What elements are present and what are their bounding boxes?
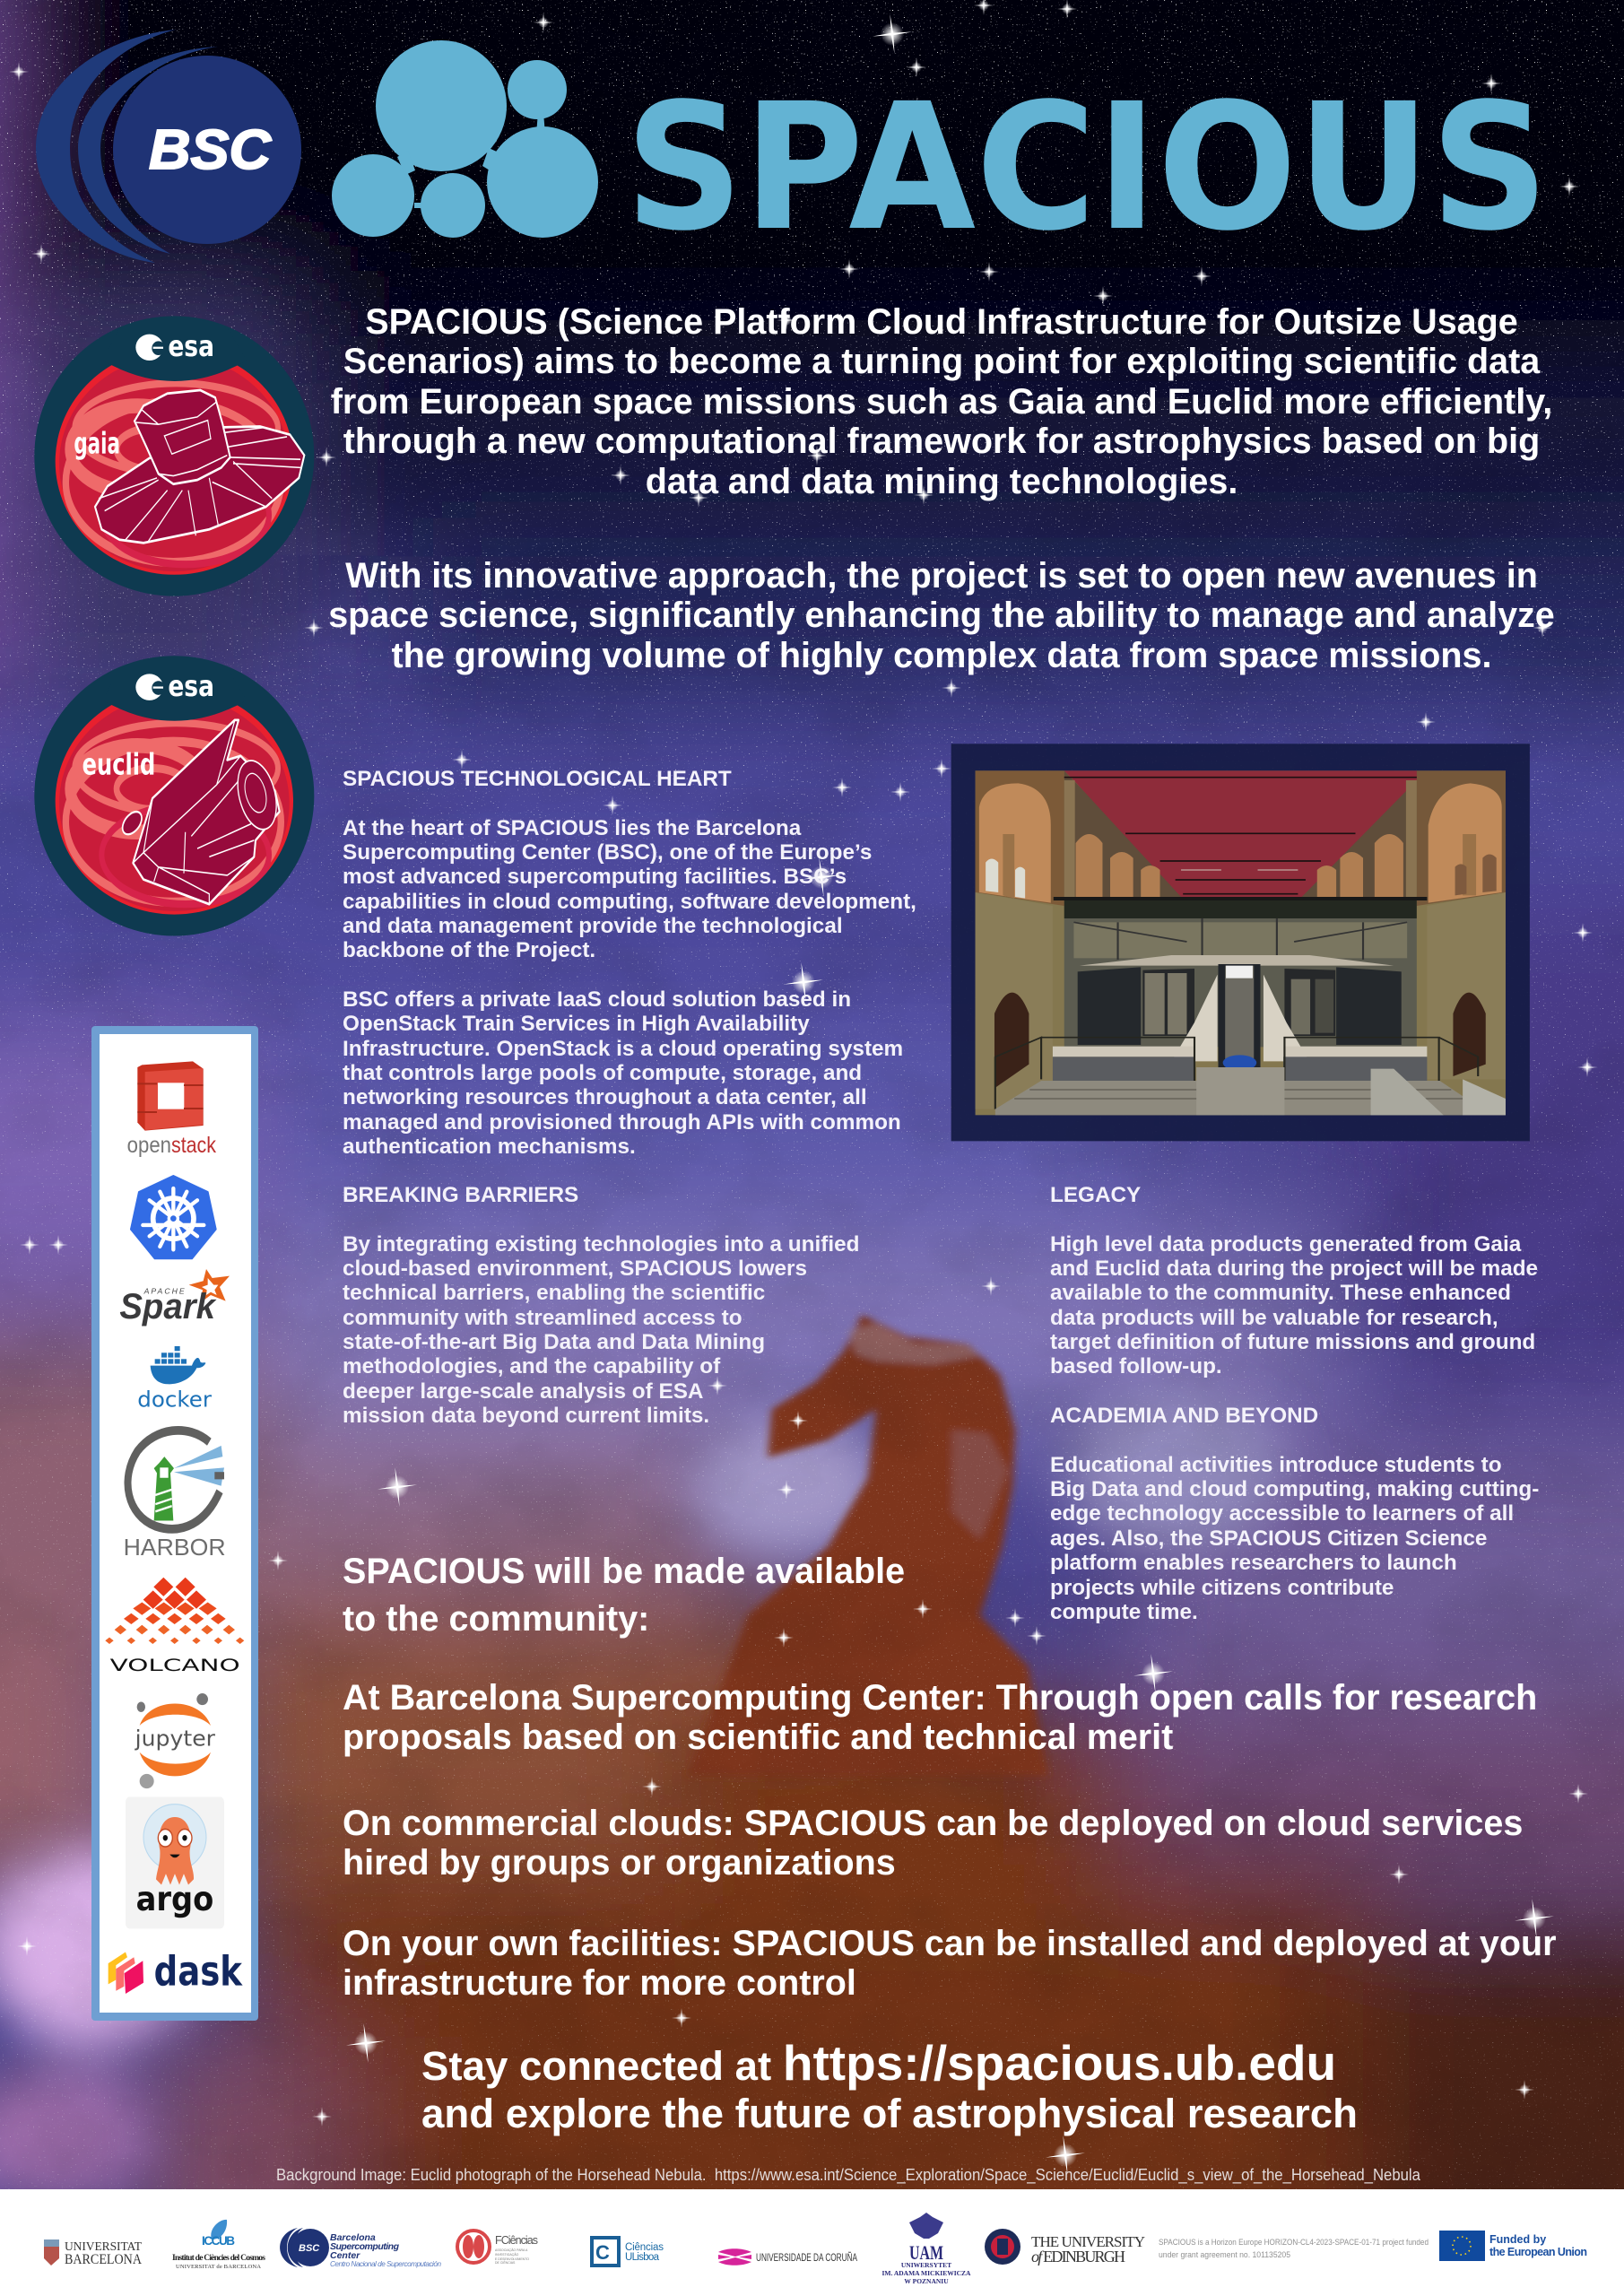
section: legacy and academia: and Euclid data during the project will be made: [1050, 1257, 1538, 1281]
intro paragraph: data and data mining technologies.: [646, 462, 1238, 501]
partner: Barcelona Supercomputing Center: BSC: [299, 2243, 320, 2254]
section: technological heart: Infrastructure. OpenStack is a cloud operating system: [343, 1037, 903, 1061]
partner: ICCUB: UNIVERSITAT de BARCELONA: [176, 2264, 261, 2270]
section: breaking barriers: community with streamlined access to: [343, 1306, 743, 1330]
intro second paragraph: [328, 556, 1555, 675]
section: breaking barriers: BREAKING BARRIERS: [343, 1183, 578, 1207]
availability: Barcelona Supercomputing Center: At Barcelona Supercomputing Center: Through open calls for research: [343, 1678, 1537, 1718]
logo: Harbor: [124, 1431, 226, 1561]
section: technological heart: backbone of the Project.: [343, 938, 595, 962]
partner: UAM Poznan: [882, 2213, 971, 2285]
section: technological heart: authentication mechanisms.: [343, 1135, 636, 1159]
partner: FCiencias: INVESTIGAÇÃO: [495, 2252, 519, 2257]
intro paragraph: SPACIOUS (Science Platform Cloud Infrastructure for Outsize Usage: [365, 302, 1518, 342]
EU flag and funding label: the European Union: [1489, 2246, 1587, 2258]
section: breaking barriers: mission data beyond current limits.: [343, 1404, 709, 1428]
badge: Euclid: euclid: [83, 747, 155, 781]
section: breaking barriers: methodologies, and the capability of: [343, 1354, 720, 1378]
availability heading: SPACIOUS will be made available: [343, 1552, 905, 1591]
partner: UAM Poznan: W POZNANIU: [904, 2277, 949, 2285]
badge: Gaia: gaia: [74, 425, 120, 460]
partner: Barcelona Supercomputing Center: Supercomputing: [330, 2241, 400, 2252]
partner: ICCUB: Institut de Ciències del Cosmos: [172, 2254, 265, 2263]
funding statement: [1159, 2238, 1429, 2260]
partner: UAM Poznan: UAM: [909, 2241, 943, 2264]
section: breaking barriers: [343, 1183, 859, 1428]
section: technological heart: SPACIOUS TECHNOLOGICAL HEART: [343, 767, 732, 791]
section: legacy and academia: compute time.: [1050, 1600, 1198, 1624]
section: technological heart: and data management provide the technological: [343, 914, 843, 938]
call to action with project URL: [421, 2039, 1358, 2137]
section: legacy and academia: target definition of future missions and ground: [1050, 1330, 1535, 1354]
intro second paragraph: With its innovative approach, the project is set to open new avenues in: [345, 556, 1538, 596]
section: legacy and academia: [1050, 1183, 1539, 1624]
technology logos panel: [91, 1026, 258, 2021]
logo: BSC: [36, 30, 301, 263]
logo: BSC: BSC: [149, 119, 272, 181]
partner: FCiencias: DE CIÊNCIAS: [495, 2260, 516, 2265]
logo: SPACIOUS bubbles and wordmark: [332, 40, 1549, 251]
availability: Barcelona Supercomputing Center: proposals based on scientific and technical merit: [343, 1718, 1173, 1757]
partner: University of Edinburgh: [985, 2229, 1145, 2266]
partner: Universidade da Coruna: [718, 2248, 857, 2266]
logo: OpenStack: [127, 1061, 216, 1158]
section: legacy and academia: based follow-up.: [1050, 1354, 1222, 1378]
EU flag and funding label: Funded by: [1489, 2233, 1546, 2246]
section: technological heart: Supercomputing Center (BSC), one of the Europe’s: [343, 840, 872, 865]
intro paragraph: through a new computational framework for astrophysics based on big: [343, 422, 1540, 461]
partner: Universidade da Coruna: UNIVERSIDADE DA CORUÑA: [756, 2251, 857, 2264]
call to action with project URL: and explore the future of astrophysical research: [421, 2091, 1358, 2136]
partner: University of Edinburgh: THE UNIVERSITY: [1031, 2233, 1145, 2250]
logo: Apache Spark: APACHE: [143, 1287, 187, 1296]
availability: own facilities: infrastructure for more control: [343, 1963, 856, 2003]
section: technological heart: most advanced supercomputing facilities. BSC’s: [343, 865, 847, 889]
section: breaking barriers: state-of-the-art Big Data and Data Mining: [343, 1330, 765, 1354]
section: legacy and academia: ages. Also, the SPACIOUS Citizen Science: [1050, 1526, 1487, 1551]
section: technological heart: At the heart of SPACIOUS lies the Barcelona: [343, 816, 801, 840]
section: legacy and academia: LEGACY: [1050, 1183, 1141, 1207]
availability: own facilities: On your own facilities: SPACIOUS can be installed and deployed at your: [343, 1924, 1557, 1963]
intro second paragraph: space science, significantly enhancing the ability to manage and analyze: [328, 596, 1555, 635]
partner: University of Edinburgh: of EDINBURGH: [1031, 2248, 1125, 2266]
EU flag and funding label: [1439, 2231, 1587, 2261]
section: legacy and academia: High level data products generated from Gaia: [1050, 1232, 1521, 1257]
section: technological heart: [343, 767, 916, 1159]
partner: Barcelona Supercomputing Center: Center: [330, 2250, 360, 2261]
section: legacy and academia: available to the community. These enhanced: [1050, 1281, 1511, 1305]
partner: Ciencias ULisboa: ULisboa: [625, 2252, 660, 2263]
section: breaking barriers: deeper large-scale analysis of ESA: [343, 1379, 703, 1404]
availability: commercial clouds: hired by groups or organizations: [343, 1843, 896, 1883]
intro paragraph: Scenarios) aims to become a turning point for exploiting scientific data: [343, 342, 1540, 381]
logo: OpenStack: stack: [171, 1133, 216, 1158]
partner: Ciencias ULisboa: C: [595, 2241, 610, 2264]
partner: Ciencias ULisboa: [592, 2238, 664, 2266]
section: technological heart: managed and provisioned through APIs with common: [343, 1110, 901, 1135]
availability: Barcelona Supercomputing Center: [343, 1678, 1537, 1758]
section: legacy and academia: projects while citizens contribute: [1050, 1575, 1394, 1600]
logo: Argo: argo: [136, 1880, 213, 1919]
partner: FCiencias: E DESENVOLVIMENTO: [495, 2257, 529, 2261]
partner: ICCUB: ICCUB: [202, 2234, 235, 2248]
mission badges: Gaia and Euclid: [34, 316, 314, 936]
availability heading: [343, 1548, 905, 1643]
section: legacy and academia: platform enables researchers to launch: [1050, 1551, 1457, 1575]
badge: Euclid: [34, 656, 314, 935]
logo: Kubernetes: [131, 1176, 216, 1258]
funding statement: SPACIOUS is a Horizon Europe HORIZON-CL4-2023-SPACE-01-71 project funded: [1159, 2238, 1429, 2248]
section: breaking barriers: cloud-based environment, SPACIOUS lowers: [343, 1257, 807, 1281]
badge: Gaia: [34, 316, 314, 596]
section: technological heart: capabilities in cloud computing, software development,: [343, 890, 916, 914]
partner: Universitat de Barcelona: [44, 2239, 143, 2267]
availability: commercial clouds: [343, 1804, 1523, 1883]
partner: ICCUB: [172, 2220, 265, 2270]
partner: Barcelona Supercomputing Center: Barcelona: [330, 2232, 376, 2243]
section: technological heart: networking resources throughout a data center, all: [343, 1085, 867, 1109]
logo: Jupyter: [134, 1693, 215, 1788]
logo: Dask: dask: [154, 1947, 243, 1996]
logo: Dask: [109, 1947, 243, 1996]
section: legacy and academia: Educational activities introduce students to: [1050, 1453, 1502, 1477]
horsehead nebula: [688, 1315, 1048, 1776]
logo: OpenStack: open: [127, 1133, 171, 1158]
logo: Docker: docker: [137, 1387, 212, 1412]
availability: commercial clouds: On commercial clouds: SPACIOUS can be deployed on cloud services: [343, 1804, 1523, 1843]
partner: Ciencias ULisboa: Ciências: [625, 2242, 664, 2253]
section: breaking barriers: By integrating existing technologies into a unified: [343, 1232, 859, 1257]
partner: FCiencias: [457, 2231, 538, 2265]
call to action with project URL: Stay connected at https://spacious.ub.edu: [421, 2035, 1336, 2091]
partner: FCiencias: FCiências: [495, 2234, 538, 2247]
availability: own facilities: [343, 1924, 1557, 2004]
section: technological heart: that controls large pools of compute, storage, and: [343, 1061, 862, 1085]
logo: Harbor: HARBOR: [124, 1535, 226, 1561]
section: legacy and academia: ACADEMIA AND BEYOND: [1050, 1404, 1318, 1428]
intro paragraph: [331, 302, 1552, 501]
partner: UAM Poznan: IM. ADAMA MICKIEWICZA: [882, 2269, 971, 2277]
logo: Jupyter: jupyter: [134, 1727, 215, 1752]
partner: Universitat de Barcelona: BARCELONA: [65, 2252, 142, 2267]
logo: Argo: [126, 1797, 224, 1928]
image credit: Background Image: Euclid photograph of the Horsehead Nebula. https://www.esa.int/Science_Exploration/Space_Science/Euclid/Euclid_s_view_of_the_Horsehead_Nebula: [276, 2165, 1420, 2184]
section: technological heart: BSC offers a private IaaS cloud solution based in: [343, 987, 851, 1012]
intro second paragraph: the growing volume of highly complex data from space missions.: [392, 636, 1491, 675]
section: legacy and academia: edge technology accessible to learners of all: [1050, 1501, 1514, 1526]
availability heading: to the community:: [343, 1599, 649, 1639]
photo: MareNostrum supercomputer in framed panel: [942, 735, 1542, 1148]
logo: Volcano: [105, 1578, 244, 1676]
partner: FCiencias: ASSOCIAÇÃO PARA A: [495, 2248, 528, 2252]
section: legacy and academia: data products will be valuable for research,: [1050, 1306, 1498, 1330]
logo: Apache Spark: Spark: [119, 1287, 217, 1326]
footer: partner logo strip: [0, 2189, 1624, 2296]
logo: Docker: [137, 1346, 212, 1412]
section: legacy and academia: Big Data and cloud computing, making cutting-: [1050, 1477, 1539, 1501]
partner: UAM Poznan: UNIWERSYTET: [901, 2261, 951, 2269]
funding statement: under grant agreement no. 101135205: [1159, 2250, 1290, 2260]
section: technological heart: OpenStack Train Services in High Availability: [343, 1012, 810, 1036]
intro paragraph: from European space missions such as Gaia and Euclid more efficiently,: [331, 382, 1552, 422]
partner: Barcelona Supercomputing Center: Centro Nacional de Supercomputación: [330, 2260, 441, 2268]
logo: Volcano: VOLCANO: [110, 1657, 240, 1676]
section: breaking barriers: technical barriers, enabling the scientific: [343, 1281, 765, 1305]
partner: Universitat de Barcelona: UNIVERSITAT: [65, 2239, 143, 2253]
logo: Apache Spark: [119, 1269, 230, 1326]
partner: Barcelona Supercomputing Center: [280, 2228, 441, 2268]
